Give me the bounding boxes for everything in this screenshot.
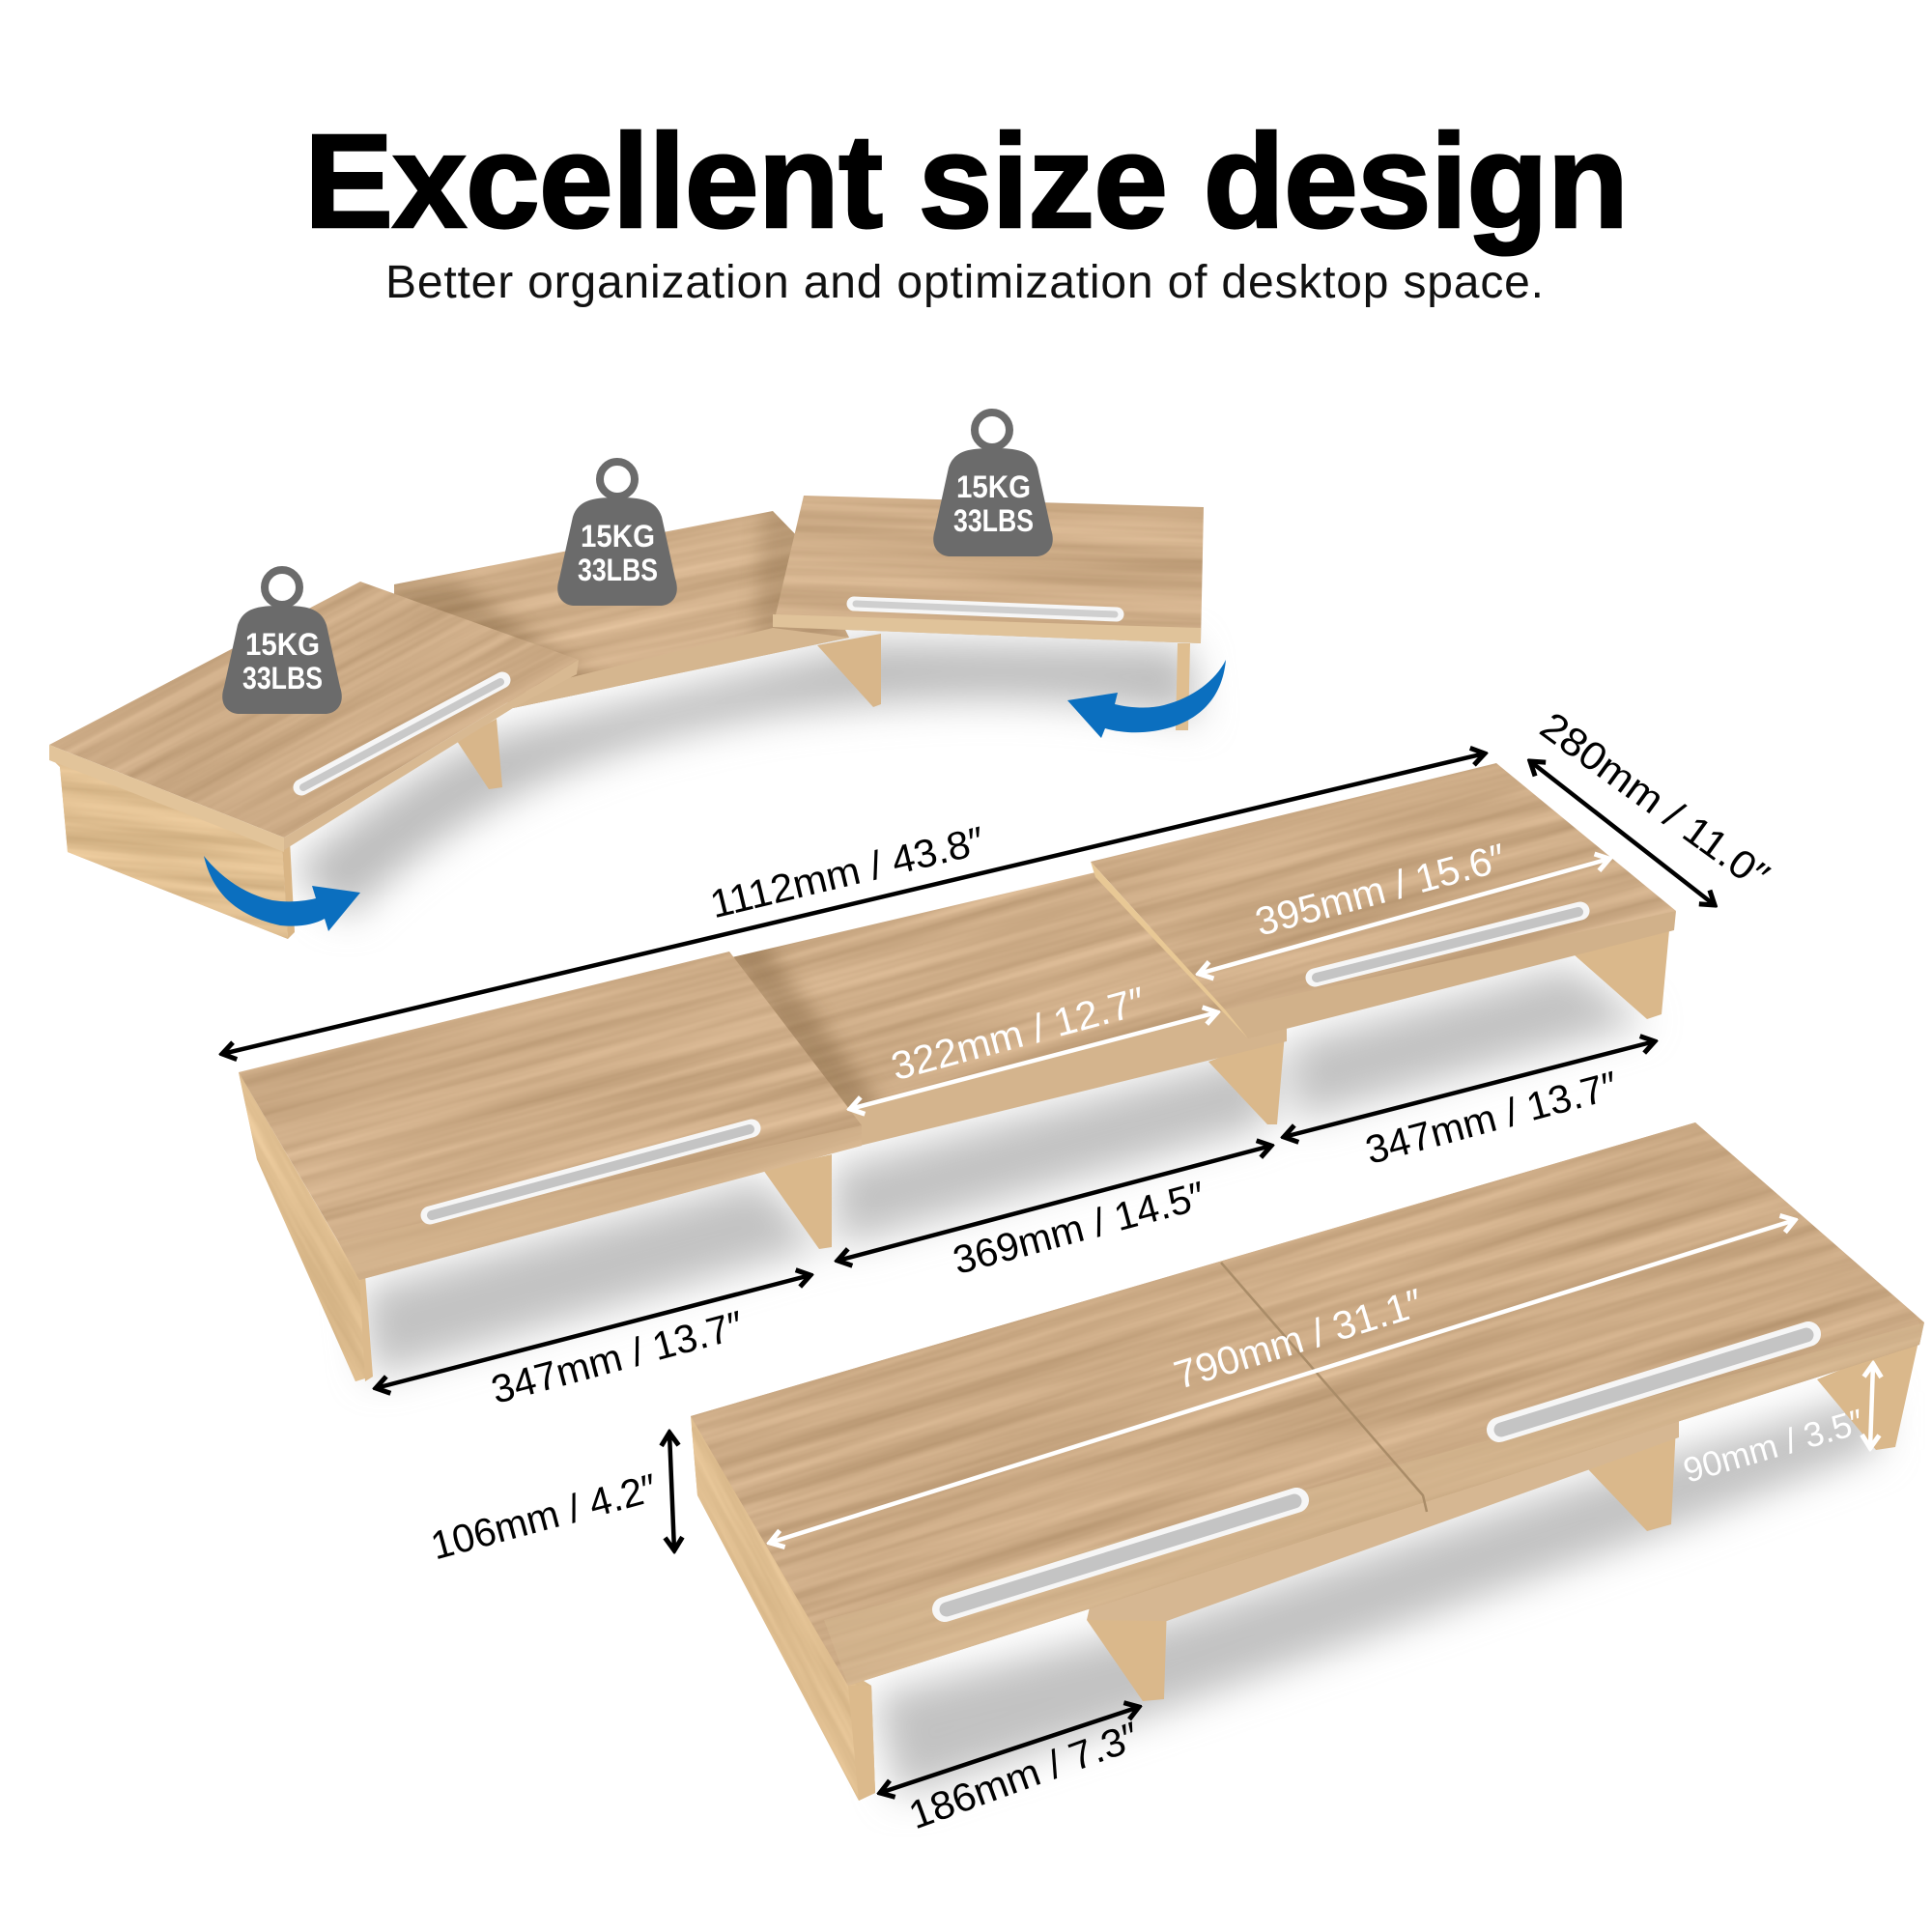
cable slot right <box>854 604 1117 614</box>
subtitle: Better organization and optimization of desktop space. <box>385 257 1544 308</box>
left panel <box>239 952 862 1280</box>
legs <box>763 930 1669 1249</box>
cable slot rear <box>1499 1334 1808 1430</box>
cable slot left <box>301 680 502 787</box>
dimension: overall length: 1112mm / 43.8″ <box>706 818 988 926</box>
rear legs <box>457 634 1190 789</box>
dimension: left opening <box>376 1275 810 1412</box>
dimension: clearance height: 90mm / 3.5″ <box>1679 1401 1868 1491</box>
seam <box>1221 1263 1427 1512</box>
cable slot <box>1315 911 1580 978</box>
cable slot <box>430 1128 752 1215</box>
icon: load weight middle: 33LBS <box>578 553 658 587</box>
dimension: right opening: 347mm / 13.7″ <box>1361 1063 1622 1173</box>
right panel <box>1091 763 1676 1036</box>
right panel <box>773 496 1204 643</box>
cable slot front <box>945 1500 1296 1609</box>
dimension: middle panel width <box>850 979 1217 1109</box>
icon: load weight middle: 15KG <box>581 519 655 554</box>
side face and top <box>691 1122 1924 1801</box>
left side face <box>239 1072 371 1381</box>
middle panel <box>394 511 849 708</box>
dimension: right panel width: 395mm / 15.6″ <box>1251 835 1510 945</box>
icon: load weight left: 15KG <box>245 627 320 662</box>
dimension: collapsed length: 790mm / 31.1″ <box>1169 1280 1428 1398</box>
legs <box>1087 1337 1919 1701</box>
dimension: overall length <box>222 753 1485 1054</box>
stand 2: fully extended riser <box>239 763 1676 1389</box>
dimension: right opening <box>1284 1041 1655 1173</box>
floor shadow <box>874 1391 1879 1797</box>
icon: load weight right: 33LBS <box>953 503 1034 538</box>
dimension: right panel width <box>1199 835 1609 974</box>
icon: load weight left <box>222 570 342 714</box>
stand 1: swivelled riser with load ratings <box>49 409 1226 939</box>
dimension: collapsed length <box>770 1220 1795 1543</box>
dimension: middle opening: 369mm / 14.5″ <box>949 1173 1209 1283</box>
icon: load weight left: 33LBS <box>242 661 323 696</box>
left side face <box>49 756 288 939</box>
dimension: depth: 280mm / 11.0″ <box>1532 703 1777 898</box>
dimension: total height: 106mm / 4.2″ <box>426 1465 662 1568</box>
floor shadow <box>290 642 1198 918</box>
dimension: left opening: 347mm / 13.7″ <box>487 1302 748 1412</box>
dimension: middle panel width: 322mm / 12.7″ <box>887 979 1150 1089</box>
dimension: middle opening <box>838 1146 1271 1283</box>
icon: load weight right: 15KG <box>956 469 1031 504</box>
arrow: right panel rotation <box>1067 660 1226 738</box>
middle panel <box>733 872 1287 1146</box>
floor shadows <box>362 966 1647 1377</box>
left panel <box>49 582 579 852</box>
arrow: left panel rotation <box>204 856 360 931</box>
dimension: leg spacing: 186mm / 7.3″ <box>903 1714 1145 1837</box>
icon: load weight right <box>933 412 1053 556</box>
stand 3: collapsed riser <box>691 1122 1924 1808</box>
title: Excellent size design <box>304 107 1629 256</box>
dimension: clearance height <box>1679 1364 1873 1491</box>
icon: load weight middle <box>557 462 677 606</box>
